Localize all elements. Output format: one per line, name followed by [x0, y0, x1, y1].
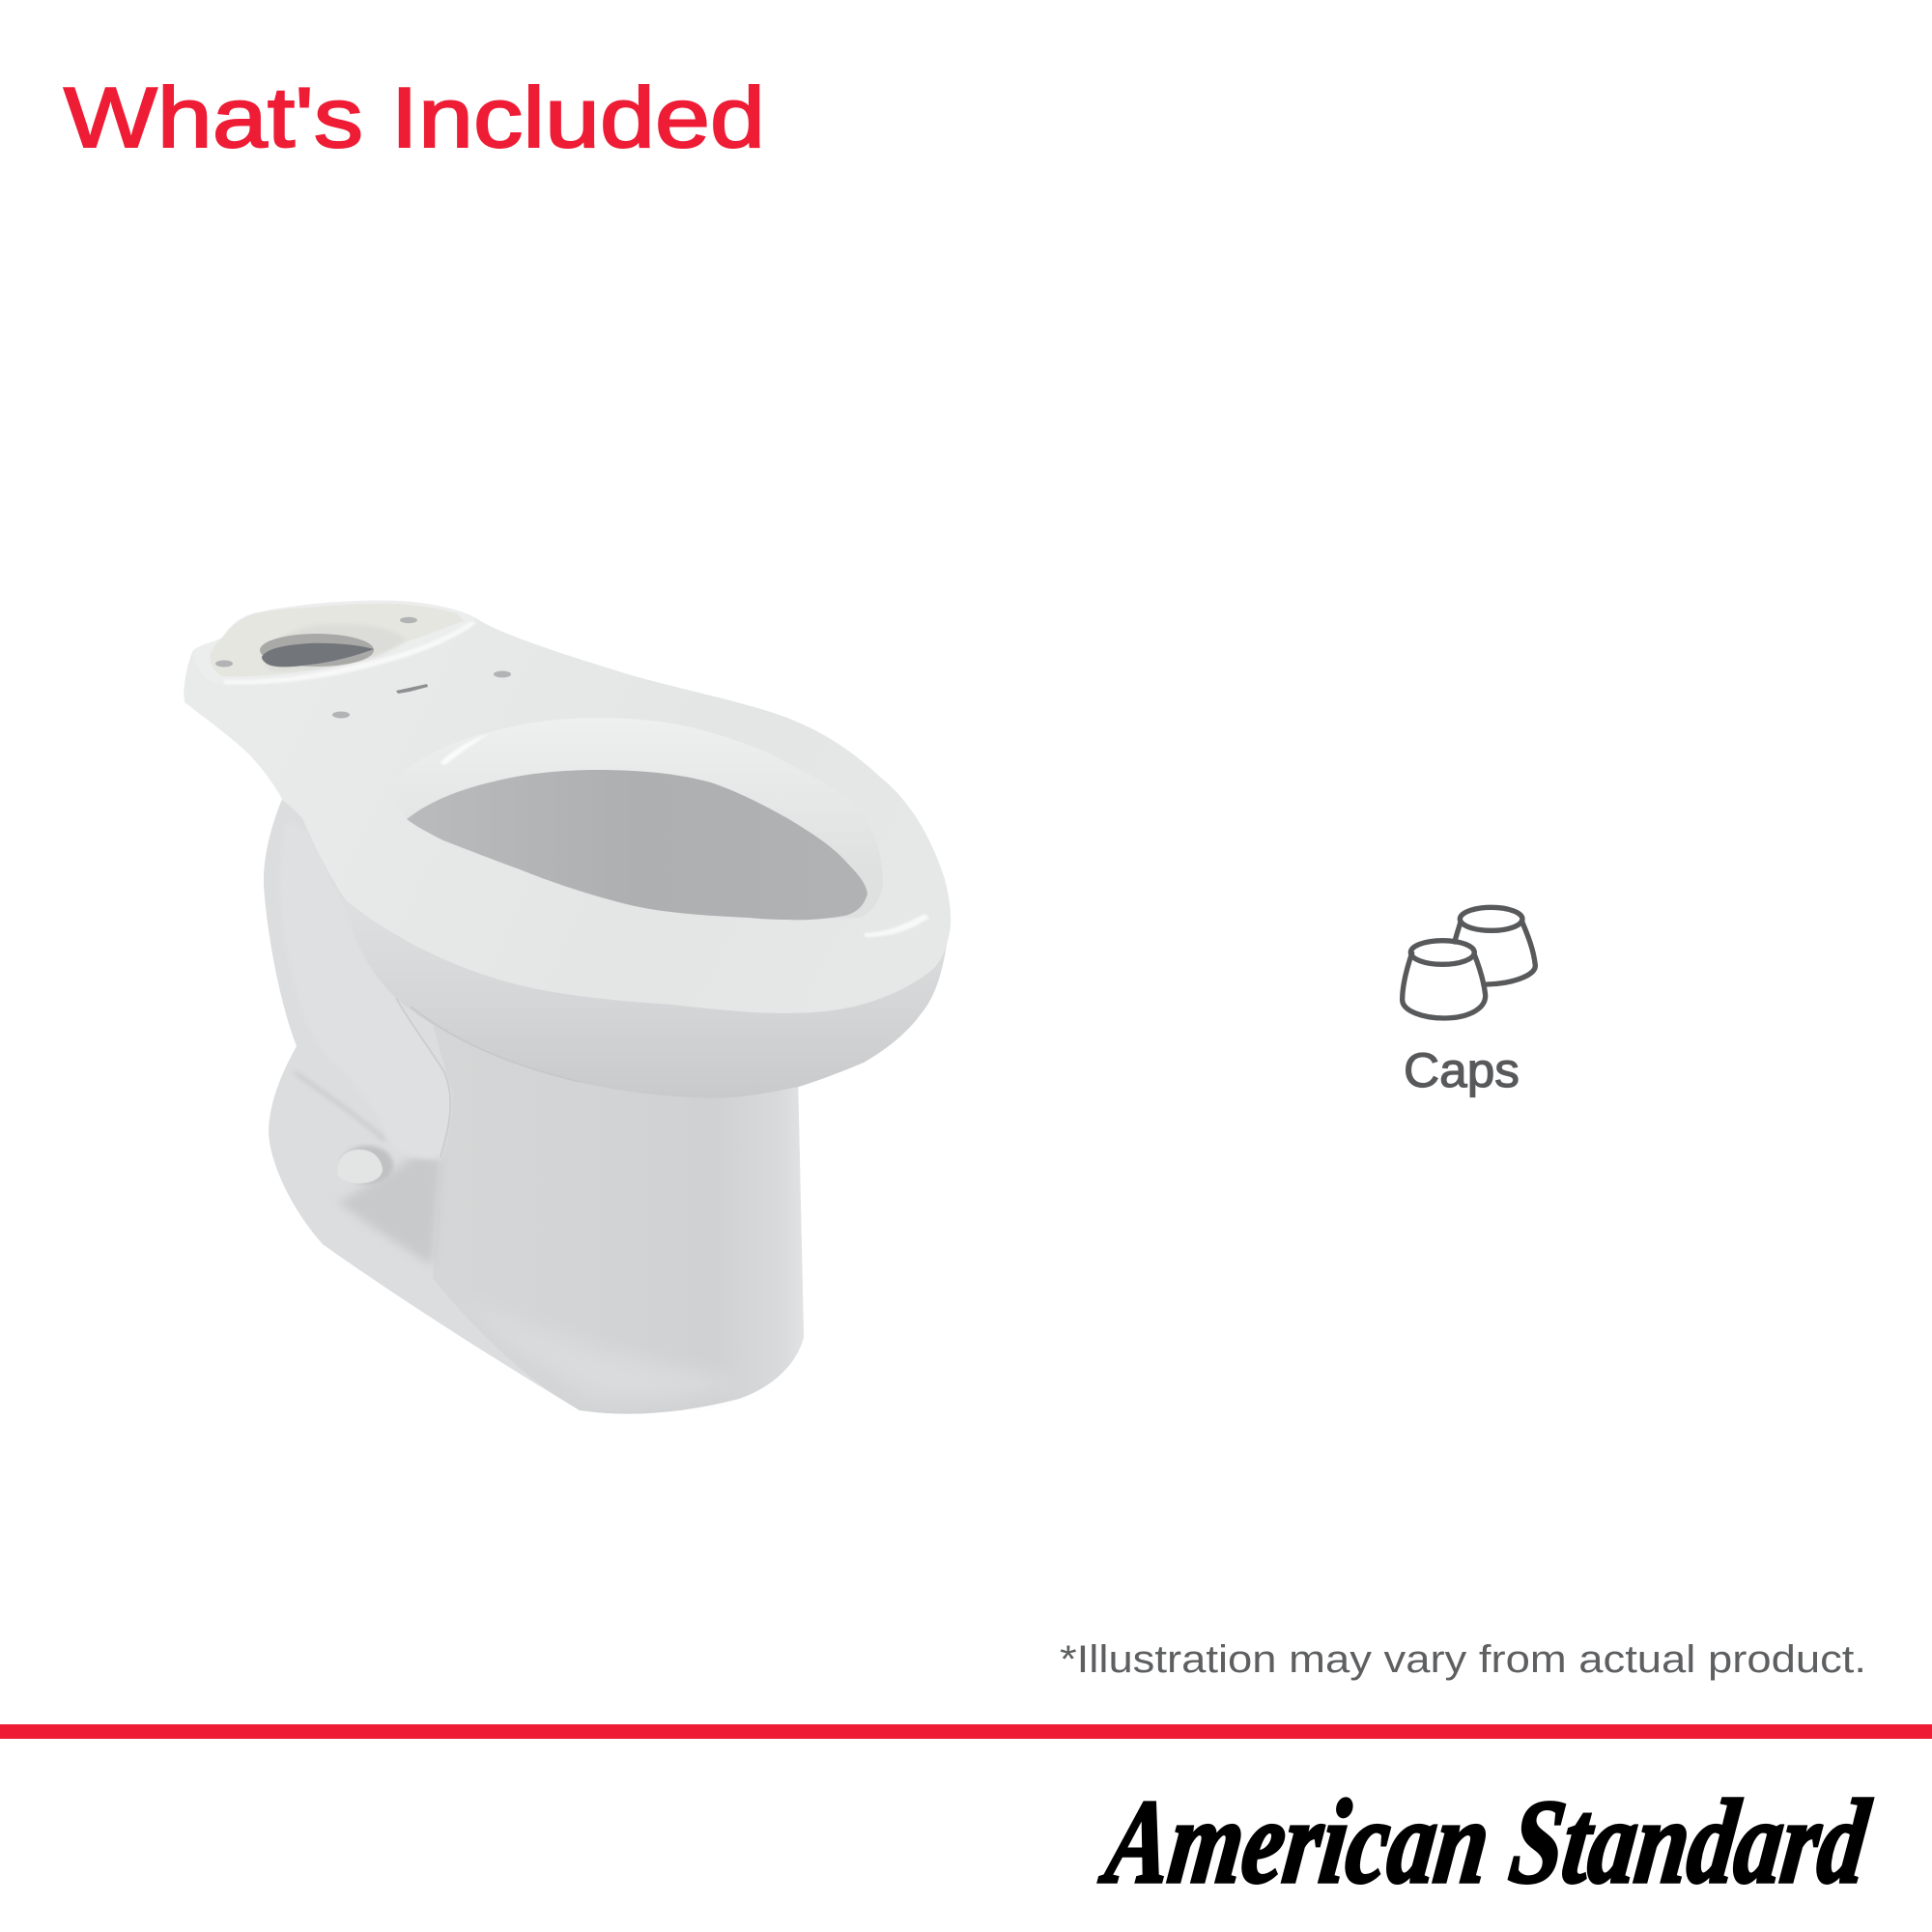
trapway hump: [280, 821, 451, 1158]
product image: toilet bowl: [184, 601, 951, 1414]
caps label: Caps: [1404, 1043, 1520, 1097]
tank bolt holes: [215, 617, 511, 719]
tank seat front gloss: [224, 621, 476, 684]
tank seat sloped area: [261, 624, 406, 670]
pedestal: [425, 995, 804, 1414]
icon: caps: [1403, 907, 1535, 1018]
rim front gloss: [865, 914, 929, 937]
disclaimer: *Illustration may vary from actual product.: [1060, 1638, 1866, 1681]
rim inner lip: [392, 718, 883, 920]
front cap: [1403, 941, 1486, 1018]
bowl underside: [346, 898, 950, 1098]
title: What's Included: [64, 70, 765, 165]
tank seat outer ledge: [193, 601, 476, 684]
bowl seam line: [411, 1007, 580, 1082]
rear cap: [1455, 907, 1535, 984]
base recess shadow: [338, 1155, 441, 1265]
rim gloss highlight: [440, 734, 488, 765]
tank seat recess: [210, 604, 464, 676]
base panel ridge: [295, 1072, 384, 1140]
pedestal lower highlight: [454, 1294, 744, 1400]
red divider bar: [0, 1724, 1932, 1739]
flush opening: [260, 634, 374, 667]
drain nub: [337, 1146, 393, 1184]
lower body silhouette: [264, 797, 804, 1414]
embossed brand mark: [396, 684, 428, 694]
deck and rim: [184, 601, 951, 1013]
hump contour line: [396, 998, 450, 1157]
bowl interior: [407, 770, 867, 920]
